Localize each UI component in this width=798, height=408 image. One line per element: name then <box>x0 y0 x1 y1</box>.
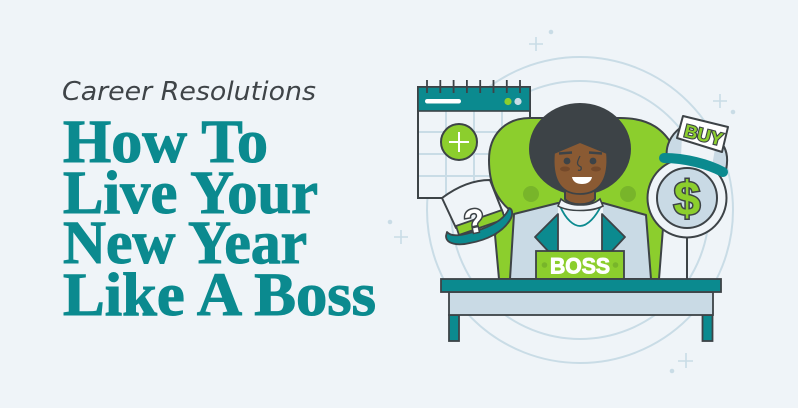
title: How To Live Your New Year Like A Boss: Live Your <box>63 160 318 227</box>
hat crown <box>667 128 727 170</box>
concentric background rings <box>427 57 733 363</box>
subtitle: Career Resolutions: Career Resolutions <box>62 77 316 107</box>
face <box>554 142 607 194</box>
icon: left top hat with question mark: ? <box>461 201 488 241</box>
title: How To Live Your New Year Like A Boss: Like A Boss <box>63 262 376 329</box>
icon: dollar sign on post with hat and BUY card: $ <box>674 173 701 226</box>
icon: dollar sign on post with hat and BUY card: BUY <box>682 121 725 150</box>
coin <box>648 158 726 238</box>
necklace <box>560 206 601 226</box>
title: How To Live Your New Year Like A Boss <box>63 109 376 329</box>
title: How To Live Your New Year Like A Boss: New Year <box>63 210 307 277</box>
lapels <box>535 214 625 252</box>
neck <box>565 185 595 204</box>
afro hair <box>529 103 631 195</box>
eyebrows, eyes, nose <box>559 152 602 154</box>
shirt <box>558 206 603 260</box>
decorative sparkles <box>388 30 734 372</box>
icon: left top hat with question mark <box>442 180 512 244</box>
BOSS nameplate <box>536 251 624 279</box>
person: boss with afro <box>510 103 651 279</box>
BOSS nameplate: BOSS <box>550 254 610 278</box>
icon: dollar sign on post with hat and BUY card <box>648 116 728 279</box>
title: How To Live Your New Year Like A Boss: How To <box>63 109 268 176</box>
post <box>686 236 688 279</box>
green armchair <box>489 118 675 279</box>
BUY card <box>677 116 728 152</box>
smile <box>572 177 592 184</box>
cheeks <box>560 166 570 172</box>
hat brim <box>664 158 723 172</box>
desk <box>441 279 721 341</box>
icon: calendar <box>418 80 530 198</box>
jacket <box>510 203 651 279</box>
collar <box>558 199 603 210</box>
